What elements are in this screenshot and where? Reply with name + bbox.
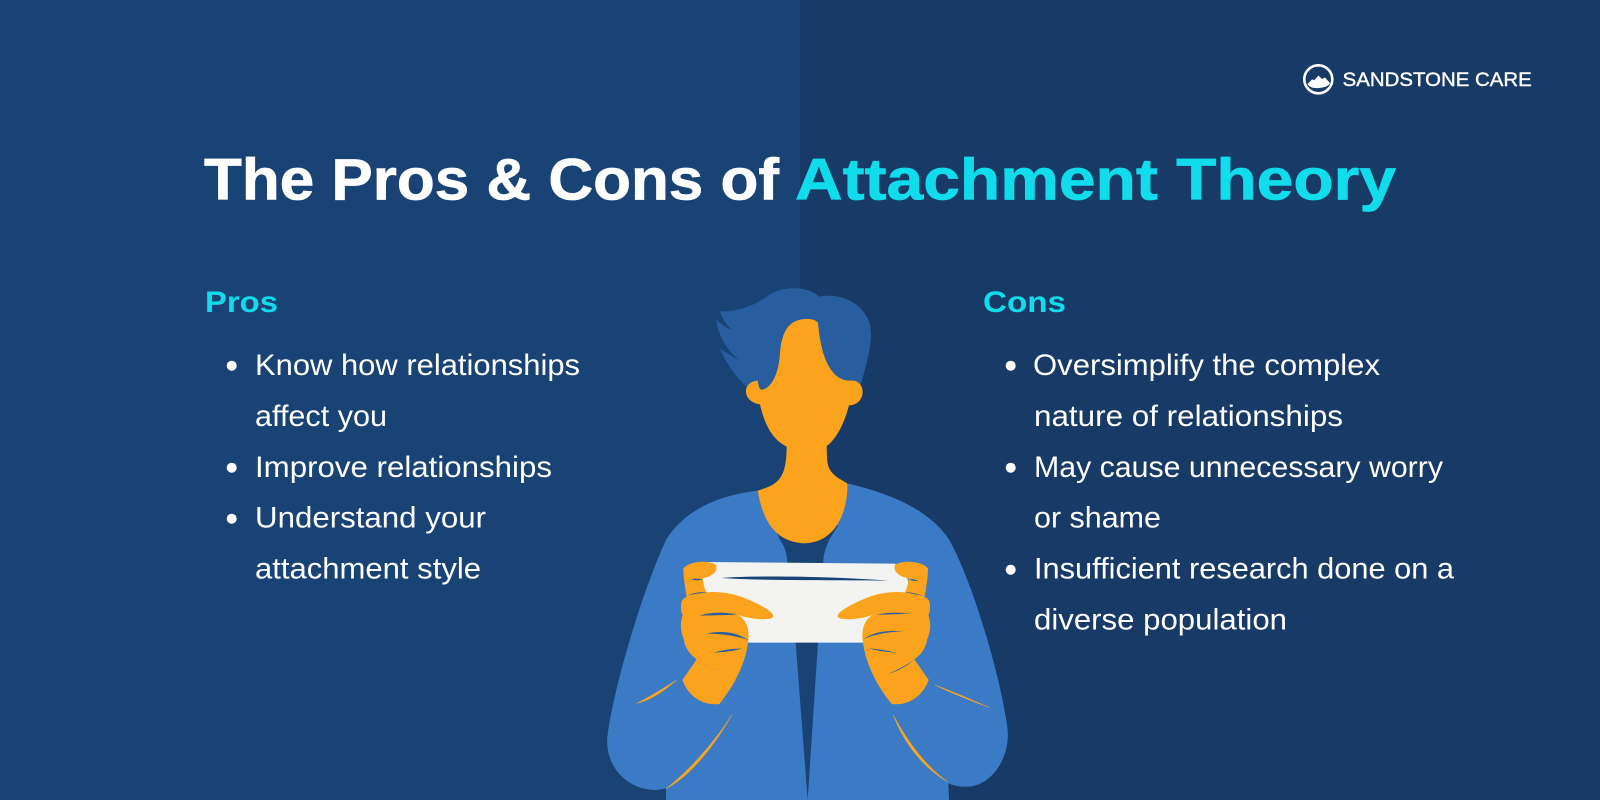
shirt gap [775, 525, 838, 800]
sleeve fold lines [637, 680, 989, 789]
head and neck [746, 319, 863, 543]
heading: cons: Cons [983, 286, 1066, 319]
right hand [838, 562, 930, 704]
phone [702, 562, 910, 643]
list: pros bullets: affect you [255, 400, 387, 433]
logo wordmark: SANDSTONE CARE [1343, 70, 1532, 91]
left hand [681, 562, 773, 704]
list: pros bullets: attachment style [255, 552, 481, 586]
list: pros bullets: Improve relationships [255, 451, 552, 484]
list: pros bullets: Understand your [255, 502, 486, 534]
heading: pros: Pros [205, 286, 278, 319]
icon: mountain in circle [1304, 65, 1332, 93]
title [204, 148, 1396, 212]
illustration: person holding a phone [607, 288, 1008, 800]
list: cons bullets: Oversimplify the complex [1033, 349, 1380, 382]
list: cons bullets: May cause unnecessary worry [1034, 451, 1443, 484]
list: cons bullets: diverse population [1034, 604, 1287, 636]
logo: Sandstone Care [1304, 65, 1532, 93]
title: Attachment Theory [795, 148, 1396, 212]
list: cons bullets: nature of relationships [1034, 400, 1343, 433]
list: cons bullets: or shame [1034, 502, 1161, 534]
list: pros bullets: Know how relationships [255, 349, 580, 382]
hair [716, 288, 871, 390]
jacket [607, 483, 1008, 800]
list: cons bullets: Insufficient research done on a [1034, 552, 1455, 586]
panel: cons [983, 286, 1455, 636]
list: cons bullets [1006, 349, 1455, 636]
panel: pros [205, 286, 580, 586]
title: The Pros & Cons of [204, 148, 780, 212]
list: pros bullets [227, 349, 580, 586]
